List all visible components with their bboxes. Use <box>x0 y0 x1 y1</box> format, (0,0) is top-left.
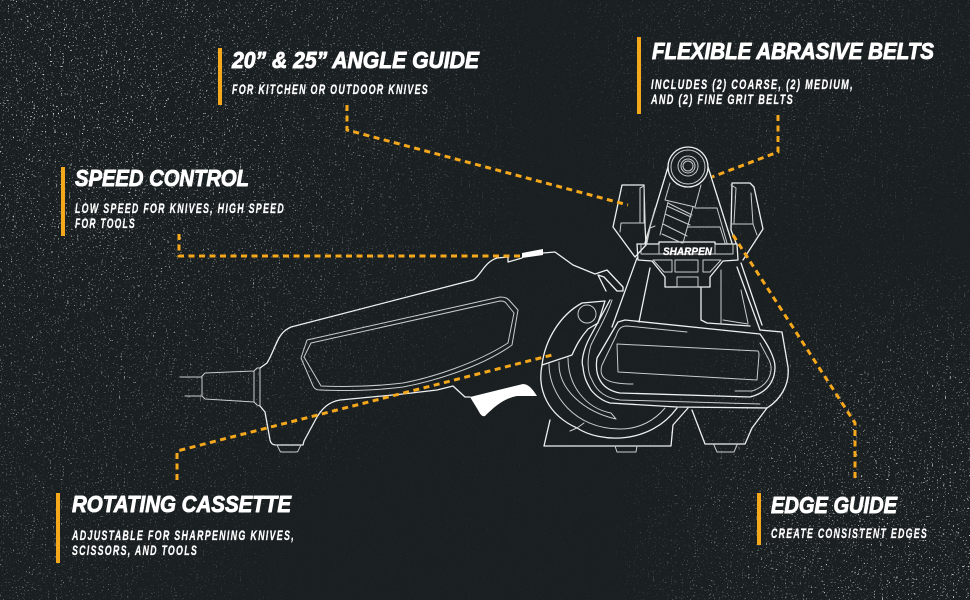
text: cassette description: SCISSORS, AND TOOLS <box>72 542 198 558</box>
speed control switch <box>522 249 543 258</box>
power cord <box>180 377 202 396</box>
dashed leader: rotating cassette <box>177 355 552 480</box>
dashed leader: flexible belts <box>712 115 778 177</box>
text: angle guide description: FOR KITCHEN OR OUTDOOR KNIVES <box>232 81 429 97</box>
text: cassette description <box>71 527 295 558</box>
heading: speed control: SPEED CONTROL <box>75 165 249 191</box>
strain relief collar <box>202 368 260 406</box>
tension arm and spring <box>646 183 727 243</box>
callout: rotating cassette <box>56 491 295 563</box>
frame legs <box>612 258 762 330</box>
base and feet <box>544 408 767 452</box>
sharpen label: SHARPEN <box>663 246 713 258</box>
belt housing outer <box>582 300 788 408</box>
left side guard <box>613 185 646 257</box>
text: cassette description: ADJUSTABLE FOR SHARPENING KNIVES, <box>71 527 295 543</box>
dashed leader: edge guide <box>731 232 855 478</box>
product line drawing: knife sharpener <box>180 147 788 452</box>
heading: flexible abrasive belts: FLEXIBLE ABRASIVE BELTS <box>652 38 935 64</box>
callout: speed control <box>61 165 285 236</box>
dashed leader: speed control <box>179 234 522 256</box>
handle body outline <box>260 252 623 445</box>
handle grip panel <box>301 297 518 391</box>
heading: rotating cassette: ROTATING CASSETTE <box>72 491 292 517</box>
callout: angle guide <box>218 47 480 105</box>
right side guard <box>731 183 763 260</box>
heading: edge guide: EDGE GUIDE <box>771 492 898 518</box>
text: belts description: AND (2) FINE GRIT BELTS <box>650 91 794 107</box>
belt housing inner window <box>588 300 771 404</box>
roller and belt <box>645 147 732 243</box>
rotating cassette housing <box>541 301 677 438</box>
handle foot <box>277 445 301 452</box>
text: belts description <box>650 76 854 107</box>
text: speed description <box>75 200 285 231</box>
white trigger <box>470 384 537 416</box>
text: speed description: FOR TOOLS <box>75 215 136 231</box>
text: belts description: INCLUDES (2) COARSE, (2) MEDIUM, <box>651 76 854 92</box>
heading: angle guide: 20” & 25” ANGLE GUIDE <box>231 47 480 73</box>
text: speed description: LOW SPEED FOR KNIVES, HIGH SPEED <box>75 200 285 216</box>
callout: edge guide <box>757 492 928 545</box>
dashed leader: angle guide <box>347 105 628 205</box>
callout: flexible abrasive belts <box>637 37 935 114</box>
sharpen plate <box>637 242 738 287</box>
